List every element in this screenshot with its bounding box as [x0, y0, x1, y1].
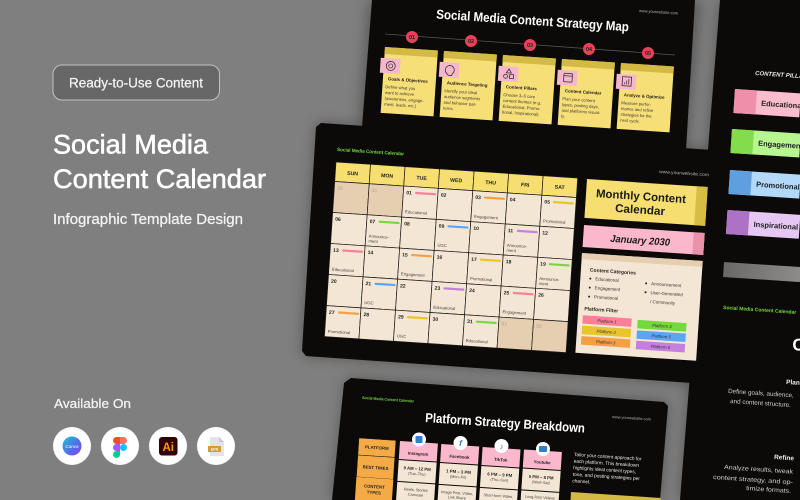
content categories: Content Categories	[590, 268, 636, 277]
timeline with steps	[385, 31, 675, 59]
week 4: UGC	[364, 300, 374, 306]
card: content calendar: Plan your content	[562, 96, 596, 103]
timeline with steps: 04	[586, 47, 593, 53]
week 1: 01	[406, 190, 412, 197]
pillar: promotional	[728, 170, 800, 199]
column: Facebook: Facebook	[449, 454, 470, 460]
week 2: 11	[508, 228, 513, 234]
week 2: 09	[439, 224, 445, 230]
step: refine: timize formats.	[746, 485, 792, 495]
week 5: UGC	[397, 333, 406, 339]
calendar website label: www.yourwebsite.com	[659, 169, 709, 177]
badge: ready to use: Ready-to-Use Content	[69, 76, 203, 90]
pillar: engagement	[730, 129, 800, 158]
timeline with steps: 05	[645, 51, 651, 57]
week 4: 23	[434, 286, 441, 292]
pillar: grey bar	[723, 262, 800, 282]
week 4	[326, 275, 570, 322]
platform icons: f	[459, 438, 463, 448]
card: audience targeting	[436, 51, 497, 120]
weekday header: TUE	[416, 175, 427, 182]
card: content pillars: content themes (e.g.	[503, 98, 541, 105]
panel: platform strategy	[332, 378, 668, 500]
week 5: 28	[363, 312, 369, 318]
subtitle: Infographic Template Design	[53, 212, 243, 228]
week 1: 30	[337, 186, 343, 192]
week 2: 10	[473, 226, 479, 232]
card: analyze and optimize: strategies for the	[620, 112, 653, 119]
panel: top strategy map	[362, 0, 695, 150]
column: Facebook	[438, 444, 479, 500]
platform filter	[581, 306, 687, 353]
weekday header: SUN	[347, 171, 358, 177]
column: TikTok: TikTok	[494, 457, 508, 463]
icon: Illustrator: Ai	[162, 442, 174, 454]
weekday header: WED	[450, 178, 463, 184]
step: refine	[713, 454, 795, 495]
weekday header: FRI	[521, 182, 530, 189]
card: goals and objectives: want to achieve	[385, 90, 415, 97]
column: Facebook: (Mon–Fri)	[450, 475, 467, 480]
card: audience targeting: Identify your ideal	[444, 88, 477, 95]
platform description: each platform. This breakdown	[573, 459, 640, 469]
platform label: Social Media Content Calendar	[362, 396, 415, 403]
weekday header: SAT	[554, 185, 566, 191]
week 4: 24	[469, 288, 475, 294]
sidebar title block: Calendar	[615, 203, 666, 218]
week 4: 26	[538, 293, 544, 299]
week 3: 13	[333, 248, 339, 254]
main title	[53, 130, 266, 194]
week 5: Promotional	[328, 329, 350, 335]
sidebar title block	[584, 179, 708, 226]
week 3: Promotional	[470, 276, 493, 282]
column: Facebook: 1 PM – 3 PM	[446, 468, 471, 475]
column: TikTok: 6 PM – 9 PM	[487, 471, 513, 478]
card: content pillars: Educational, Promo-	[502, 104, 541, 111]
content categories: / Community	[650, 299, 676, 306]
platform description: tone, and posting strategies per	[573, 472, 640, 482]
shadows behind panels	[302, 0, 800, 500]
week 3: 19	[540, 261, 546, 268]
column: Youtube: (Wed–Sat)	[532, 480, 551, 485]
platform description: channel.	[572, 478, 591, 486]
platform description: Tailor your content approach for	[574, 452, 642, 462]
week 1: 05	[544, 199, 550, 206]
card: goals and objectives	[377, 47, 438, 116]
card: analyze and optimize: Measure perfor-	[621, 100, 652, 107]
week 1: Engagement	[474, 214, 499, 220]
week 2: 12	[542, 230, 548, 237]
platform filter: Platform Filter	[584, 306, 618, 315]
card: content pillars: Content Pillars	[506, 84, 538, 91]
week 2: ment	[368, 238, 379, 244]
card: content calendar	[554, 59, 615, 128]
week 3	[329, 244, 572, 291]
card: goals and objectives: Goals & Objectives	[388, 76, 429, 84]
platform filter: Platform 4	[652, 323, 672, 329]
platform icons	[412, 432, 550, 456]
row labels	[355, 438, 396, 500]
platform filter: Platform 3	[596, 339, 616, 345]
timeline with steps: 03	[527, 43, 533, 49]
week 5: Educational	[466, 338, 488, 344]
week 2: Announce-	[507, 243, 528, 249]
week 3: 16	[436, 255, 443, 261]
panel: calendar slide	[302, 123, 712, 383]
step: plan: Define goals, audience,	[728, 388, 794, 399]
content categories: Announcement	[651, 281, 682, 288]
icon: Figma	[101, 427, 139, 465]
platform filter: Platform 5	[651, 333, 672, 340]
card: audience targeting: audience segments	[444, 94, 480, 101]
card: goals and objectives: ment, leads, etc.)	[384, 101, 417, 109]
platform icons: ♪	[500, 442, 504, 451]
weekday header	[335, 162, 578, 198]
main title: Content Calendar	[53, 164, 266, 194]
column: Instagram: (Tue–Thu)	[408, 472, 426, 477]
week 3: 14	[367, 250, 374, 256]
week 1: Educational	[405, 209, 427, 216]
week 2: 06	[335, 217, 341, 223]
card: analyze and optimize: Analyze & Optimize	[624, 92, 665, 100]
column: TikTok: (Thu–Sun)	[490, 478, 509, 483]
platform description	[572, 452, 642, 489]
week 4: 22	[400, 283, 406, 290]
week 1: 03	[475, 195, 481, 201]
week 5: 29	[398, 314, 404, 321]
legend card	[575, 253, 703, 361]
step: refine: Analyze results, tweak	[724, 464, 794, 476]
platform description: highlights ideal content types,	[573, 465, 636, 475]
column: Instagram: Reels, Stories	[404, 487, 428, 493]
month banner: January 2030	[610, 234, 671, 249]
column: TikTok	[479, 447, 521, 500]
column: Instagram	[396, 441, 438, 500]
section label: Social Media Content Calendar	[723, 305, 797, 316]
content categories: Educational	[595, 276, 619, 283]
card: content pillars	[495, 55, 556, 124]
row labels: CONTENT	[364, 483, 385, 490]
week 2: ment	[506, 248, 517, 253]
content categories: User-Generated	[650, 290, 683, 297]
column: Youtube	[521, 450, 562, 500]
website label: www.yourwebsite.com	[639, 8, 679, 16]
week 1: 04	[510, 197, 516, 203]
icon: Canva	[53, 427, 91, 465]
icon: Illustrator	[149, 427, 187, 465]
week 5: 02	[536, 324, 542, 330]
badge: ready to use	[53, 65, 220, 100]
week 4: 25	[503, 290, 510, 297]
card: goals and objectives: Define what you	[385, 84, 416, 91]
week 5: 27	[329, 310, 335, 316]
row labels: TYPES	[367, 490, 381, 496]
card: content calendar: ly.	[561, 113, 565, 119]
week 4: 21	[365, 281, 372, 287]
month banner	[583, 225, 705, 255]
week 1: 31	[372, 188, 378, 194]
week 2: 08	[404, 221, 410, 228]
week 5	[324, 306, 568, 353]
card: audience targeting: Audience Targeting	[447, 80, 488, 88]
week 3: 15	[402, 252, 408, 259]
content categories: Promotional	[594, 294, 618, 301]
card: analyze and optimize: mance and refine	[621, 106, 654, 113]
column: Facebook: Image Post, Video,	[441, 490, 473, 496]
column: TikTok: Short-form Video,	[483, 493, 513, 499]
available on heading: Available On	[54, 396, 131, 411]
week 2	[331, 212, 574, 260]
step: refine: content strategy, and op-	[713, 474, 793, 486]
row labels: PLATFORM	[365, 444, 389, 451]
step: plan: Plan	[786, 379, 800, 387]
column: Instagram: Carousel	[408, 493, 423, 498]
card: analyze and optimize: next cycle.	[620, 117, 640, 124]
content categories: Engagement	[595, 285, 621, 292]
card: audience targeting: and behavior pat-	[443, 100, 477, 107]
column: Instagram: 9 AM – 12 PM	[403, 465, 431, 472]
week 4: 20	[331, 279, 337, 285]
week 3: 17	[471, 257, 477, 263]
week 5: 30	[432, 317, 439, 323]
pillar: promotional: Promotional	[756, 180, 800, 192]
platform website: www.yourwebsite.com	[612, 415, 651, 422]
left intro column	[53, 65, 266, 465]
week 5: 01	[501, 321, 508, 328]
week 2: UGC	[437, 243, 447, 248]
card: analyze and optimize	[613, 63, 674, 132]
icon: EPS file: EPS	[211, 448, 219, 452]
platform filter: Platform 1	[597, 318, 618, 324]
platform title: Platform Strategy Breakdown	[425, 410, 585, 436]
week 2: Announce-	[369, 233, 390, 240]
column: Instagram: Instagram	[408, 451, 429, 457]
week 4: Engagement	[502, 309, 527, 316]
card: goals and objectives: (awareness, engage-	[384, 96, 425, 103]
step: plan: and content structure.	[730, 398, 791, 409]
calendar grid	[324, 162, 578, 353]
week 3: 18	[506, 259, 512, 266]
column: Youtube: 5 PM – 8 PM	[529, 474, 554, 481]
week 4: Educational	[433, 305, 455, 311]
icon: Canva: Canva	[65, 444, 79, 449]
calendar section label: Social Media Content Calendar	[337, 147, 404, 157]
yellow note	[570, 492, 661, 500]
sidebar title block: Monthly Content	[596, 188, 686, 206]
pillar: inspirational	[726, 210, 800, 239]
pillar: educational	[733, 89, 800, 118]
week 1	[333, 181, 576, 229]
content categories	[588, 268, 685, 306]
week 3: ment	[539, 281, 549, 287]
week 3: Engagement	[401, 271, 426, 278]
panel: right content pillars	[680, 0, 800, 500]
icon: EPS file	[197, 427, 235, 465]
weekday header: MON	[381, 173, 394, 180]
step: plan	[728, 379, 800, 409]
main title: Social Media	[53, 130, 209, 160]
week 3: Educational	[332, 267, 354, 273]
strategy map title: Social Media Content Strategy Map	[436, 7, 629, 34]
card: content calendar: types, posting days,	[562, 102, 599, 109]
week 1: Promotional	[543, 218, 566, 225]
week 2: 07	[370, 219, 376, 225]
card: content pillars: Choose 3–5 core	[503, 92, 536, 99]
week 5: 31	[467, 319, 473, 325]
column: Youtube: Youtube	[534, 459, 551, 465]
pillar: inspirational: Inspirational	[753, 220, 798, 232]
platform filter: Platform 2	[596, 329, 617, 335]
week 3: Announce-	[539, 276, 560, 282]
card: content calendar: and platforms visual-	[561, 108, 601, 115]
card: audience targeting: terns.	[443, 105, 454, 111]
card: content calendar: Content Calendar	[565, 88, 602, 96]
row labels: BEST TIMES	[363, 464, 389, 471]
card: content pillars: tional, Inspirational).	[502, 109, 540, 117]
weekday header: THU	[485, 180, 496, 187]
platform filter: Platform 6	[651, 344, 671, 350]
step: refine: Refine	[774, 454, 795, 462]
timeline with steps: 02	[468, 39, 474, 45]
timeline with steps: 01	[409, 35, 415, 41]
week 1: 02	[441, 193, 447, 199]
